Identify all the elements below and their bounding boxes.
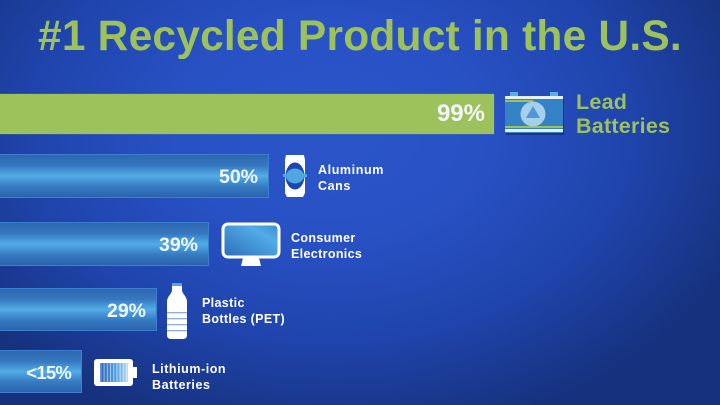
icon: aluminum can bbox=[283, 155, 307, 197]
bar: lithium-ion 15% bbox=[0, 350, 82, 393]
label: lead batteries bbox=[576, 90, 670, 138]
bar: plastic bottles 29%: 29% bbox=[107, 300, 146, 322]
label: consumer electronics: Consumer bbox=[291, 231, 356, 245]
bar: plastic bottles 29% bbox=[0, 288, 157, 331]
icon: lithium-ion battery bbox=[94, 359, 137, 386]
bar: aluminum cans 50% bbox=[0, 154, 269, 198]
label: plastic bottles: Bottles (PET) bbox=[202, 312, 285, 326]
label: lead batteries: Batteries bbox=[576, 114, 670, 138]
label: lead batteries: Lead bbox=[576, 90, 627, 114]
label: consumer electronics: Electronics bbox=[291, 247, 362, 261]
label: lithium-ion batteries: Batteries bbox=[152, 378, 210, 392]
icon: bottle bbox=[167, 283, 187, 339]
label: lithium-ion batteries: Lithium-ion bbox=[152, 362, 226, 376]
label: plastic bottles: Plastic bbox=[202, 296, 245, 310]
bar: consumer electronics 39%: 39% bbox=[159, 234, 198, 256]
label: plastic bottles bbox=[202, 296, 285, 326]
label: consumer electronics bbox=[291, 231, 362, 261]
icon: lead battery bbox=[505, 92, 564, 135]
bar: lead batteries 99% bbox=[0, 94, 494, 134]
icon: monitor bbox=[222, 222, 280, 266]
bar: aluminum cans 50%: 50% bbox=[219, 166, 258, 188]
label: lithium-ion batteries bbox=[152, 362, 226, 392]
label: aluminum cans: Aluminum bbox=[318, 163, 384, 177]
bar: consumer electronics 39% bbox=[0, 222, 209, 266]
title: #1 Recycled Product in the U.S. bbox=[38, 13, 682, 60]
bar: lithium-ion 15%: <15% bbox=[26, 362, 71, 383]
bar: lead batteries 99%: 99% bbox=[437, 100, 485, 127]
label: aluminum cans: Cans bbox=[318, 179, 351, 193]
label: aluminum cans bbox=[318, 163, 384, 193]
